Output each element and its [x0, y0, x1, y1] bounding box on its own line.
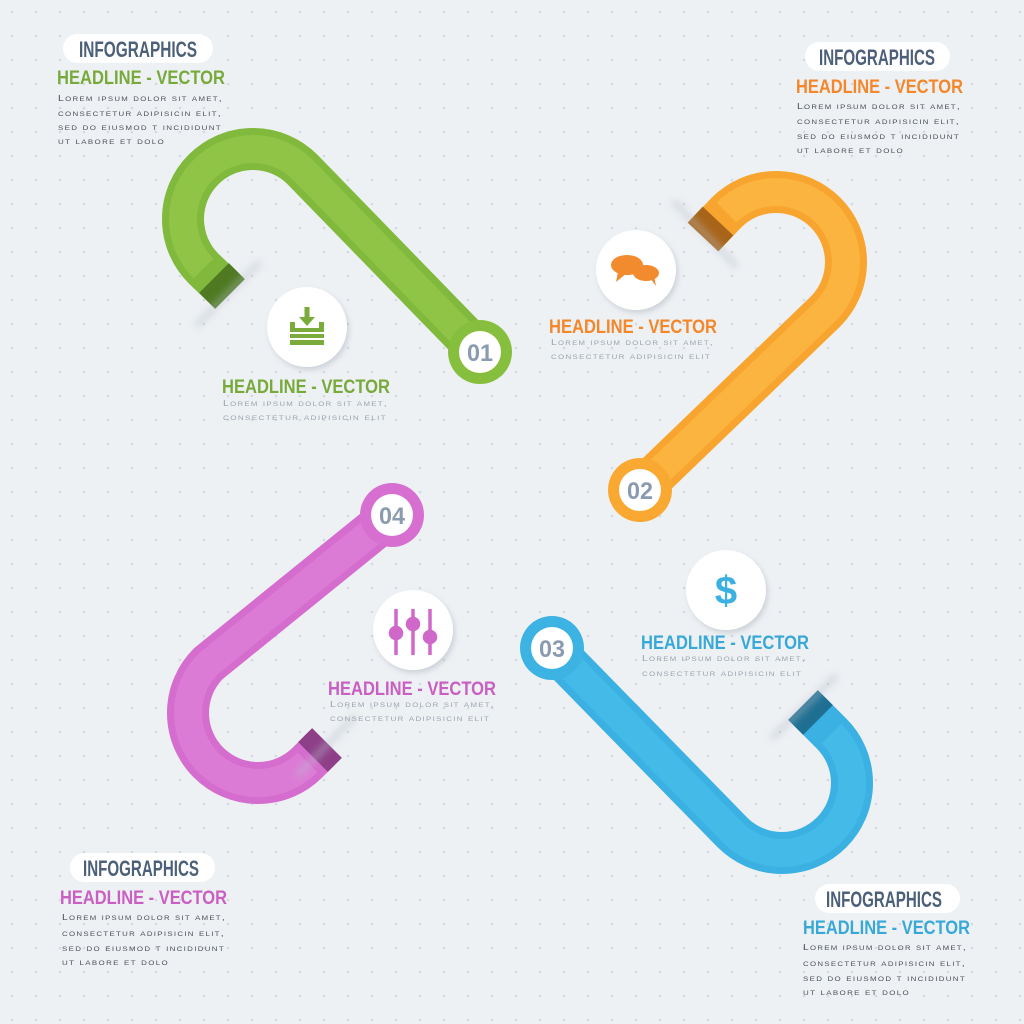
- step text: 01: consectetur adipisicin elit: [223, 413, 387, 422]
- text block: top-left: INFOGRAPHICS: [79, 37, 197, 62]
- tube: pink 04: 04: [379, 503, 406, 530]
- text block: bottom-left: consectetur adipisicin elit,: [62, 929, 225, 938]
- text block: top-left: [57, 34, 225, 146]
- text block: top-left: sed do eiusmod t incididunt: [58, 123, 222, 132]
- text block: top-left: ut labore et dolo: [58, 137, 165, 146]
- step text: 04: consectetur adipisicin elit: [330, 714, 490, 723]
- step text: 04: HEADLINE - VECTOR: [328, 679, 496, 700]
- step text: 02: [549, 317, 717, 361]
- step text: 03: [641, 633, 809, 678]
- text block: bottom-right: HEADLINE - VECTOR: [803, 918, 970, 939]
- tube: pink 04: [188, 483, 424, 783]
- text block: bottom-right: [803, 884, 970, 997]
- text block: top-right: ut labore et dolo: [797, 146, 904, 155]
- step text: 01: [222, 377, 390, 422]
- step text: 01: HEADLINE - VECTOR: [222, 377, 390, 398]
- text block: bottom-right: ut labore et dolo: [803, 988, 910, 997]
- fold shadows: [196, 201, 837, 776]
- text block: bottom-left: INFOGRAPHICS: [83, 856, 199, 881]
- step text: 01: Lorem ipsum dolor sit amet,: [223, 399, 388, 408]
- icon: green tray: [267, 287, 347, 367]
- tube: green 01: 01: [467, 340, 493, 367]
- text block: top-right: sed do eiusmod t incididunt: [797, 132, 960, 141]
- step text: 02: consectetur adipisicin elit: [551, 352, 711, 361]
- text block: bottom-left: Lorem ipsum dolor sit amet,: [62, 913, 226, 922]
- step text: 04: Lorem ipsum dolor sit amet,: [330, 700, 495, 709]
- text block: bottom-left: ut labore et dolo: [62, 958, 169, 967]
- text block: top-right: [796, 42, 963, 155]
- text block: top-left: HEADLINE - VECTOR: [57, 68, 225, 89]
- text block: top-right: INFOGRAPHICS: [819, 45, 935, 70]
- text block: bottom-right: Lorem ipsum dolor sit amet,: [803, 943, 967, 952]
- text block: top-right: consectetur adipisicin elit,: [797, 117, 960, 126]
- text block: top-right: HEADLINE - VECTOR: [796, 77, 963, 98]
- text block: bottom-right: sed do eiusmod t incididunt: [803, 974, 966, 983]
- step text: 02: Lorem ipsum dolor sit amet,: [551, 338, 714, 347]
- step text: 03: Lorem ipsum dolor sit amet,: [642, 654, 806, 663]
- text block: top-left: Lorem ipsum dolor sit amet,: [58, 94, 223, 103]
- step text: 03: HEADLINE - VECTOR: [641, 633, 809, 654]
- text block: bottom-right: consectetur adipisicin elit,: [803, 959, 966, 968]
- tube: blue 03: 03: [539, 636, 565, 663]
- step text: 03: consectetur adipisicin elit: [642, 669, 802, 678]
- icon: blue dollar: [686, 550, 766, 630]
- tube: blue 03: [520, 616, 852, 853]
- text block: bottom-left: HEADLINE - VECTOR: [60, 888, 227, 909]
- tube: orange 02: 02: [627, 478, 653, 505]
- tube: green 01: [183, 149, 512, 384]
- icon: orange chat: [596, 230, 676, 310]
- step text: 04: [328, 679, 496, 723]
- icon: pink sliders: [373, 590, 453, 670]
- text block: bottom-left: sed do eiusmod t incididunt: [62, 944, 225, 953]
- text block: top-left: consectetur adipisicin elit,: [58, 109, 222, 118]
- icon: blue dollar: $: [715, 569, 737, 613]
- tube: orange 02: [608, 192, 846, 522]
- step text: 02: HEADLINE - VECTOR: [549, 317, 717, 338]
- text block: bottom-right: INFOGRAPHICS: [826, 887, 942, 912]
- text block: bottom-left: [60, 853, 227, 967]
- text block: top-right: Lorem ipsum dolor sit amet,: [797, 102, 961, 111]
